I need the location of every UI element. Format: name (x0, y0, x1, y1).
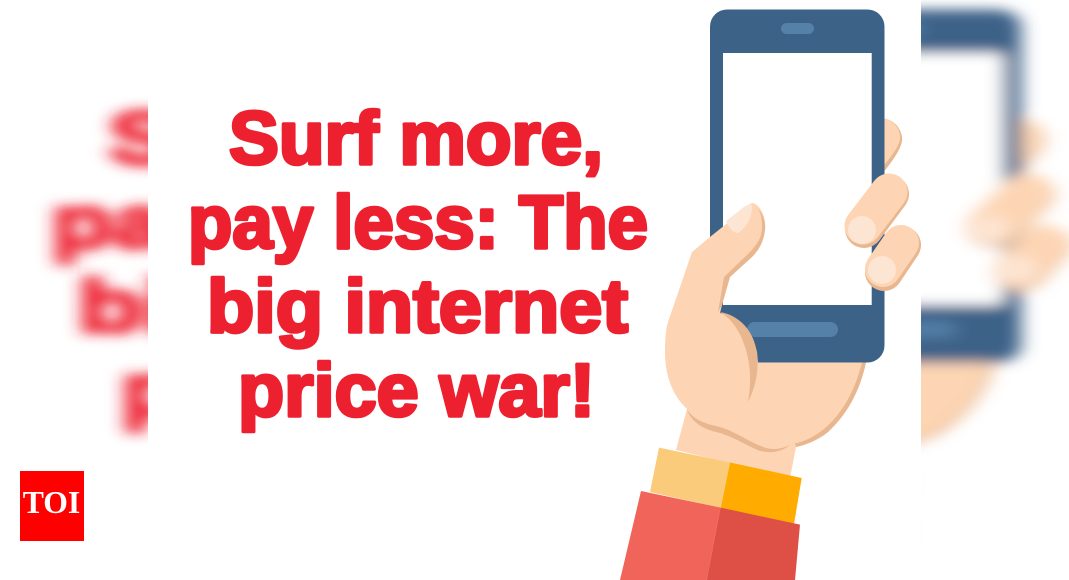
title: price war! (238, 348, 595, 432)
phone home button (747, 322, 838, 337)
ring finger (868, 243, 902, 284)
back finger behind phone (878, 118, 902, 174)
palm crease (720, 312, 758, 402)
central white panel (148, 0, 921, 580)
title: pay less: The (188, 180, 648, 264)
middle finger (848, 192, 890, 244)
palm outer edge shadow (795, 362, 866, 447)
title: Surf more, (229, 96, 603, 180)
wrist crease (687, 409, 790, 452)
phone body (710, 10, 884, 362)
sleeve (620, 491, 800, 580)
cuff (650, 448, 802, 524)
blurred background copy of the artwork: big internet (78, 265, 666, 349)
phone screen (723, 53, 872, 305)
phone speaker (781, 23, 814, 34)
blurred background copy of the artwork: price war! (121, 349, 620, 433)
icon: hand holding smartphone (620, 10, 902, 580)
blurred background copy of the artwork: Surf more, (108, 97, 631, 181)
thumb side shadow (718, 209, 765, 312)
TOI logo (20, 471, 84, 541)
blurred background copy of the artwork: pay less: The (51, 181, 694, 265)
thumb nail (726, 205, 752, 233)
title (188, 96, 648, 432)
TOI logo: TOI (23, 484, 80, 520)
title: big internet (207, 264, 628, 348)
thumb and palm (665, 203, 866, 478)
